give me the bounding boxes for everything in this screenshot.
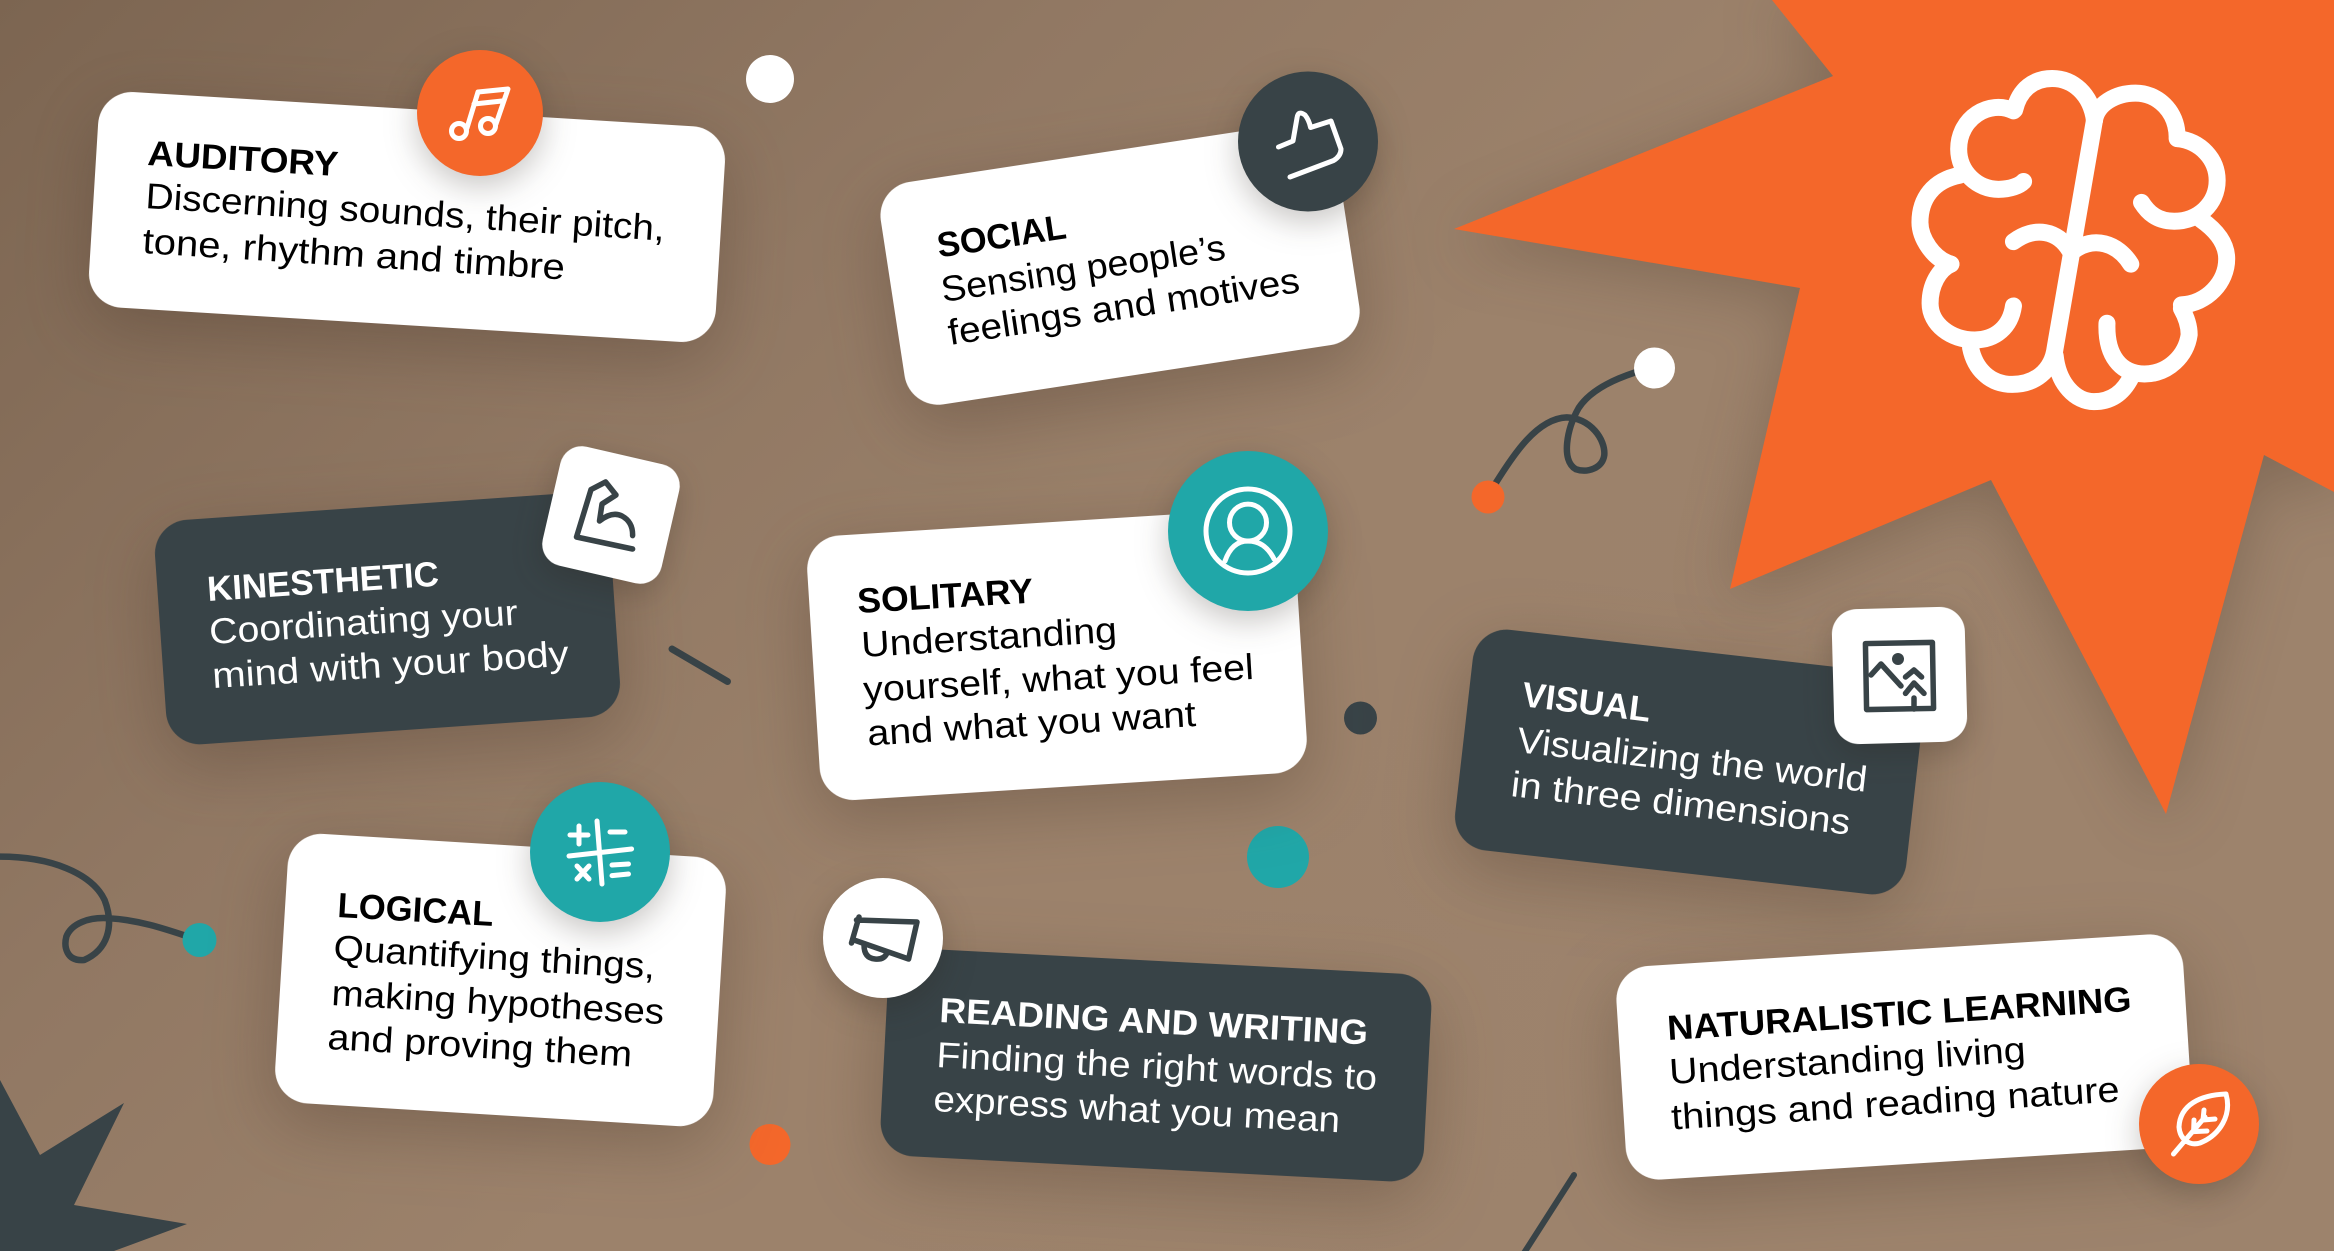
heading: KINESTHETIC xyxy=(206,555,440,609)
heading: VISUAL xyxy=(1520,675,1653,730)
panel background xyxy=(87,90,727,344)
icon: flexed arm xyxy=(538,442,684,588)
description: feelings and motives xyxy=(945,259,1302,353)
description xyxy=(1668,1029,2121,1137)
heading: AUDITORY xyxy=(147,134,339,184)
description xyxy=(933,1034,1378,1140)
icon: music note xyxy=(417,50,543,176)
panel background xyxy=(1451,626,1928,898)
description xyxy=(938,226,1302,353)
description: Finding the right words to xyxy=(936,1034,1378,1098)
icon: megaphone xyxy=(823,878,943,998)
panel background xyxy=(153,490,622,747)
heading: LOGICAL xyxy=(337,886,495,934)
description: Quantifying things, xyxy=(333,927,656,987)
panel background xyxy=(1614,932,2195,1182)
description: things and reading nature xyxy=(1670,1068,2121,1137)
card: social xyxy=(876,72,1378,409)
card: reading and writing xyxy=(823,878,1433,1183)
squiggle: top right xyxy=(1472,348,1675,514)
description: express what you mean xyxy=(933,1078,1341,1140)
description: Understanding living xyxy=(1668,1029,2027,1092)
squiggle: left xyxy=(0,857,216,960)
teal dot xyxy=(1247,826,1309,888)
description xyxy=(327,927,665,1075)
description xyxy=(141,175,666,288)
heading: SOLITARY xyxy=(856,572,1034,621)
description: tone, rhythm and timbre xyxy=(141,220,566,288)
heading: SOCIAL xyxy=(934,207,1069,265)
description: Understanding xyxy=(860,609,1118,665)
description xyxy=(860,609,1255,753)
card: visual xyxy=(1451,606,1968,898)
description: in three dimensions xyxy=(1509,763,1853,843)
card: logical xyxy=(273,782,728,1128)
description: and what you want xyxy=(866,693,1197,753)
icon: math symbols xyxy=(530,782,670,922)
description: mind with your body xyxy=(211,633,570,696)
panel background xyxy=(273,832,728,1128)
panel background xyxy=(876,117,1364,409)
orange starburst xyxy=(1454,0,2334,814)
description: making hypotheses xyxy=(331,972,665,1032)
dark dash xyxy=(672,649,728,682)
heading: READING AND WRITING xyxy=(939,991,1369,1052)
dark star: bottom left xyxy=(0,1080,187,1251)
icon: person xyxy=(1168,451,1328,611)
icon: brain xyxy=(1920,78,2227,402)
panel background xyxy=(879,947,1433,1183)
description xyxy=(208,592,570,696)
icon: thumbs up xyxy=(1238,72,1378,212)
card: kinesthetic xyxy=(153,442,684,747)
card: solitary xyxy=(805,451,1328,802)
description: Discerning sounds, their pitch, xyxy=(144,175,666,249)
dark line xyxy=(1524,1175,1574,1251)
description: Visualizing the world xyxy=(1515,719,1869,800)
icon: leaf xyxy=(2139,1064,2259,1184)
description: and proving them xyxy=(327,1016,633,1075)
heading: NATURALISTIC LEARNING xyxy=(1666,980,2133,1048)
dark dot xyxy=(1344,702,1377,734)
description: Coordinating your xyxy=(208,592,519,652)
card: auditory xyxy=(87,50,727,344)
description xyxy=(1509,719,1869,843)
card: naturalistic learning xyxy=(1614,932,2259,1184)
description: Sensing people’s xyxy=(938,226,1228,310)
panel background xyxy=(805,507,1309,802)
icon: picture xyxy=(1831,606,1968,745)
description: yourself, what you feel xyxy=(862,646,1255,710)
white dot xyxy=(746,55,794,103)
orange dot xyxy=(750,1124,790,1165)
